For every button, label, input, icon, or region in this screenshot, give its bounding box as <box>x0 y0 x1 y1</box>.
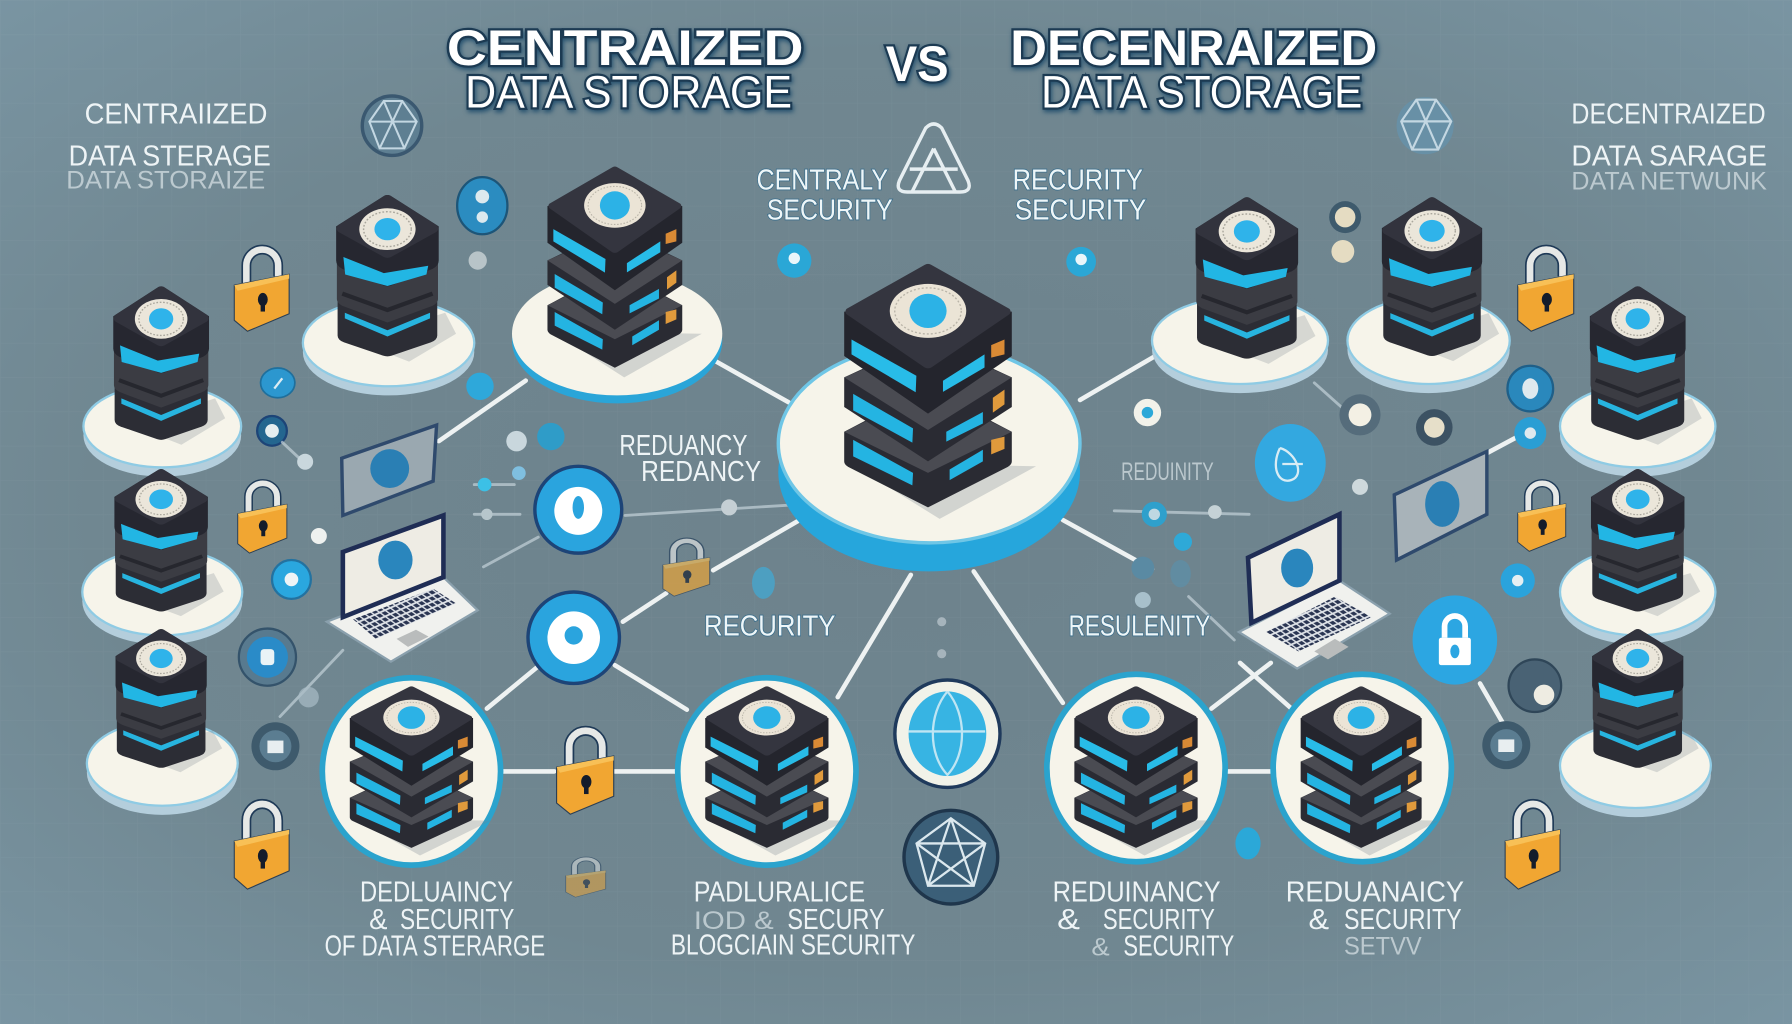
caption node 3: & <box>1057 904 1080 936</box>
triangle logo <box>898 124 969 192</box>
mesh icon top right <box>1397 97 1454 154</box>
mesh icon top left <box>362 96 422 155</box>
right corner label: DECENTRAIZED <box>1571 98 1766 130</box>
caption node 2: PADLURALICE <box>694 877 865 909</box>
large blue circle icons <box>528 424 1497 685</box>
redundancy label right: REDUINITY <box>1121 458 1214 486</box>
globe icon <box>895 680 1000 787</box>
right corner label: DATA SARAGE <box>1571 141 1767 173</box>
right column server 3 <box>1560 629 1711 817</box>
redundancy label left <box>619 430 761 488</box>
caption node 4 <box>1286 877 1464 960</box>
centrally security label: SECURITY <box>767 194 893 226</box>
right laptop <box>1239 514 1390 669</box>
caption node 1: DEDLUAINCY <box>360 877 513 909</box>
title: decentralized: DATA STORAGE <box>1041 66 1362 117</box>
caption node 1: & <box>369 904 387 936</box>
title: centralized: CENTRAIZED <box>447 19 803 76</box>
centrally security label: CENTRALY <box>757 165 888 197</box>
connector lines <box>280 357 1520 771</box>
title: centralized: DATA STORAGE <box>465 66 792 117</box>
central server platform <box>778 344 1080 571</box>
right corner label: DATA NETWUNK <box>1571 168 1767 196</box>
redundancy label left: REDANCY <box>641 456 761 488</box>
title: decentralized: DECENRAIZED <box>1010 19 1377 76</box>
upper right server 1 <box>1152 197 1328 393</box>
left column server 3 <box>87 629 238 815</box>
caption node 3: SECURITY <box>1103 904 1215 936</box>
padlocks <box>234 250 1574 897</box>
caption node 1: SECURITY <box>400 904 514 936</box>
left corner label: DATA STORAIZE <box>66 167 265 195</box>
recurity security label: SECURITY <box>1015 194 1146 226</box>
lower node 4 <box>1273 674 1451 862</box>
left monitor <box>342 425 437 515</box>
redundancy label left: REDUANCY <box>619 430 747 462</box>
caption node 2: BLOGCIAIN SECURITY <box>671 929 915 961</box>
central server <box>844 264 1036 519</box>
caption node 4: SETVV <box>1344 932 1422 960</box>
small dot icons <box>239 177 1561 859</box>
left laptop <box>327 515 478 662</box>
caption node 3 <box>1053 877 1234 962</box>
left column server 1 <box>83 286 241 477</box>
recurity security label: RECURITY <box>1013 165 1143 197</box>
recurity security label <box>1013 165 1146 226</box>
caption node 2 <box>671 877 915 961</box>
right monitor <box>1394 451 1487 560</box>
caption node 3: REDUINANCY <box>1053 877 1221 909</box>
left corner label: CENTRAIIZED <box>85 98 267 130</box>
recurity label: RECURITY <box>704 610 835 642</box>
caption node 3: SECURITY <box>1123 930 1234 962</box>
caption node 4: REDUANAICY <box>1286 877 1464 909</box>
caption node 4: SECURITY <box>1344 904 1462 936</box>
upper left server on blue-rim platform <box>512 167 722 403</box>
resilience label: RESULENITY <box>1069 610 1210 642</box>
centrally security label <box>757 165 893 226</box>
lower node 1 <box>322 678 501 865</box>
left corner label <box>66 98 271 195</box>
lower node 2 <box>678 678 856 865</box>
right column server 1 <box>1560 286 1715 477</box>
right corner label <box>1571 98 1767 196</box>
upper right server 2 <box>1347 197 1510 393</box>
upper left server 2 <box>303 195 474 395</box>
title: centralized <box>447 19 803 117</box>
caption node 3: & <box>1091 933 1110 961</box>
title: decentralized <box>1010 19 1377 117</box>
network sphere icon <box>904 810 998 904</box>
lower node 3 <box>1047 674 1225 862</box>
caption node 2: IOD & <box>694 907 774 935</box>
right column server 2 <box>1560 469 1715 645</box>
left column server 2 <box>82 469 242 645</box>
caption node 1 <box>325 877 545 962</box>
title: vs: VS <box>886 35 949 92</box>
caption node 2: SECURY <box>787 904 885 936</box>
caption node 1: OF DATA STERARGE <box>325 930 545 962</box>
caption node 4: & <box>1309 904 1329 936</box>
left corner label: DATA STERAGE <box>69 141 271 173</box>
